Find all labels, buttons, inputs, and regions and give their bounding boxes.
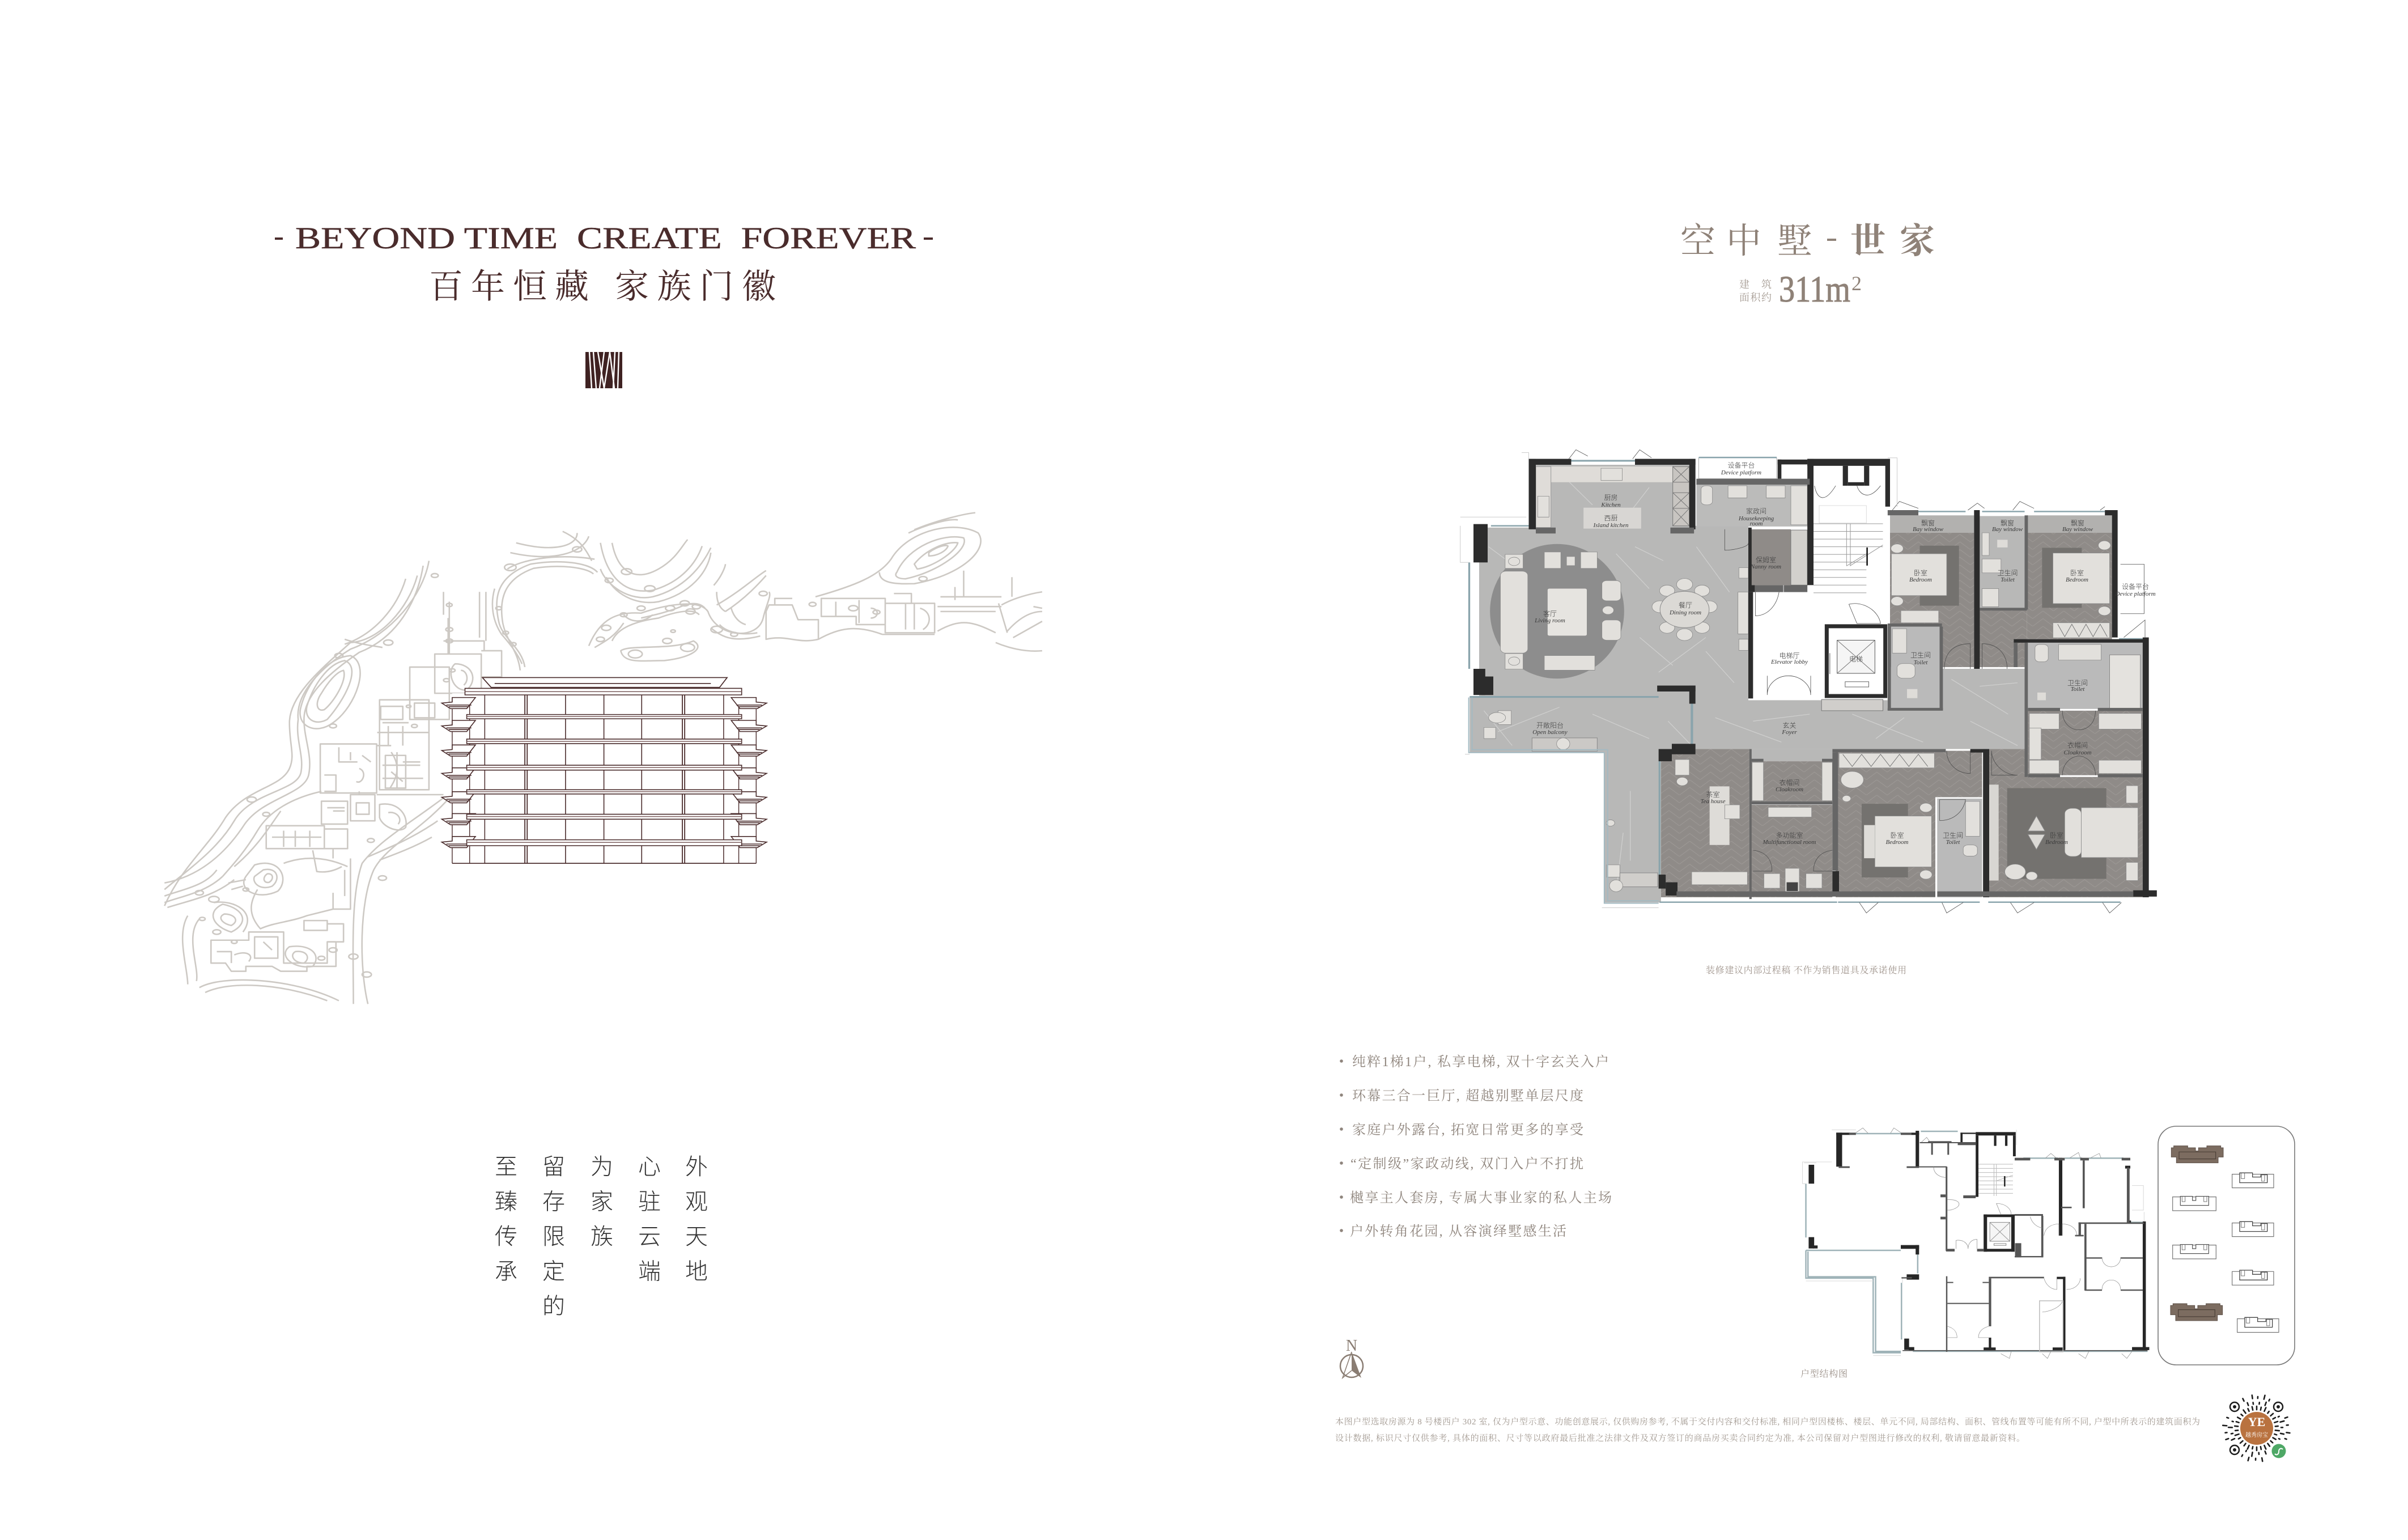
room labels: 衣帽间	[2067, 741, 2088, 749]
chinese slogan: 百年恒藏	[429, 268, 589, 306]
footnote	[1335, 1416, 2200, 1443]
walls	[1473, 459, 2157, 897]
room labels: 设备平台	[2122, 583, 2149, 591]
room labels: 客厅	[1543, 610, 1557, 618]
room labels: 西厨	[1604, 514, 1618, 522]
room labels: Bay window	[1913, 526, 1944, 533]
room labels: Toilet	[2001, 576, 2015, 583]
highlighted building bottom	[2171, 1304, 2223, 1321]
left heading block	[275, 221, 933, 388]
room labels: 卫生间	[2067, 679, 2088, 687]
landscape line drawing	[164, 513, 1042, 1004]
room labels: 卧室	[2050, 831, 2063, 839]
stairs	[1814, 524, 1883, 593]
highlighted building top	[2171, 1146, 2223, 1163]
room labels: 卧室	[2070, 569, 2084, 577]
room labels: 家政间	[1746, 507, 1766, 515]
area label: 面积约	[1739, 292, 1772, 303]
poem vertical text	[495, 1155, 708, 1319]
room labels: 卧室	[1914, 569, 1927, 577]
key plan buildings	[2171, 1146, 2279, 1333]
rugs	[1490, 544, 1624, 678]
room labels: 餐厅	[1679, 601, 1692, 609]
room labels: room	[1750, 520, 1763, 527]
room labels: Living room	[1534, 617, 1565, 624]
room labels: 玄关	[1782, 722, 1797, 729]
main floor plan	[1460, 450, 2157, 913]
poem column 1: 外观天地	[685, 1155, 708, 1284]
room labels: Toilet	[1914, 659, 1928, 666]
unit title: 世	[1850, 222, 1885, 261]
room labels: 衣帽间	[1779, 779, 1800, 787]
room labels: Bedroom	[2045, 839, 2068, 846]
feature bullet list: 家庭户外露台, 拓宽日常更多的享受	[1352, 1122, 1583, 1138]
unit title	[1680, 222, 1935, 261]
area label: 2	[1851, 272, 1862, 295]
key plan panel	[2158, 1126, 2295, 1365]
english slogan: BEYOND TIME CREATE FOREVER	[295, 221, 916, 255]
unit title: 空	[1680, 222, 1715, 261]
QR code	[2223, 1395, 2290, 1461]
north compass icon: N	[1346, 1337, 1357, 1355]
chinese slogan	[429, 268, 776, 306]
footnote: 本图户型选取房源为 8 号楼西户 302 室, 仅为户型示意、功能创意展示, 仅供购房参考, 不属于交付内容和交付标准, 相同户型因楼栋、楼层、单元不同, 局部结构、面积、管线布置等可能有所不同, 户型中所表示的建筑面积为	[1335, 1416, 2200, 1427]
room labels: 电梯	[1849, 655, 1863, 663]
unit title: 家	[1900, 222, 1935, 261]
qr finders	[2230, 1402, 2283, 1454]
mini program badge	[2271, 1444, 2286, 1458]
room labels: Foyer	[1781, 729, 1797, 736]
room labels: Toilet	[1946, 839, 1960, 846]
building elevation	[441, 677, 767, 863]
north compass icon	[1340, 1337, 1363, 1378]
room labels: Nanny room	[1750, 563, 1781, 570]
feature bullet list	[1340, 1054, 1612, 1239]
plan graphics	[1460, 450, 2157, 913]
room labels: 卫生间	[1943, 831, 1963, 839]
unit title: 墅	[1777, 222, 1812, 261]
structure drawing	[1802, 1128, 2149, 1359]
room labels: 茶室	[1706, 791, 1720, 799]
room labels: Device platform	[1721, 469, 1761, 476]
room labels: Dining room	[1669, 609, 1701, 616]
room labels: 卧室	[1890, 831, 1904, 839]
room labels: 厨房	[1604, 494, 1618, 502]
qr center logo	[2240, 1412, 2273, 1445]
feature bullet list: 户外转角花园, 从容演绎墅感生活	[1350, 1224, 1566, 1239]
room labels: Device platform	[2114, 591, 2156, 597]
room labels: Housekeeping	[1738, 515, 1774, 522]
feature bullet list: “定制级”家政动线, 双门入户不打扰	[1350, 1156, 1583, 1172]
poem column 2: 心驻云端	[638, 1155, 661, 1284]
elevator	[1827, 626, 1885, 696]
furniture	[1500, 571, 1528, 653]
room labels: Elevator lobby	[1770, 659, 1808, 665]
room labels: 设备平台	[1727, 461, 1755, 469]
unit title: 中	[1726, 222, 1761, 261]
room labels: 开敞阳台	[1536, 722, 1564, 729]
room labels	[1532, 461, 2156, 846]
poem column 4: 留存限定的	[542, 1155, 565, 1319]
room labels: Bedroom	[2066, 576, 2088, 583]
room labels: 飘窗	[1921, 519, 1935, 527]
room labels: Kitchen	[1600, 502, 1621, 508]
poem column 5: 至臻传承	[495, 1155, 517, 1284]
poem column 3: 为家族	[591, 1155, 613, 1249]
qr center logo: 越秀房宝	[2245, 1431, 2268, 1439]
qr dashes	[2223, 1395, 2290, 1461]
room labels: 电梯厅	[1779, 652, 1800, 660]
room labels: Bay window	[2062, 526, 2093, 533]
room labels: Multifunctional room	[1762, 839, 1816, 846]
room labels: Island kitchen	[1592, 522, 1629, 529]
area label	[1739, 269, 1862, 310]
room labels: Bedroom	[1886, 839, 1909, 846]
room labels: Tea house	[1701, 798, 1726, 805]
room labels: 卫生间	[1910, 651, 1931, 659]
room labels: Bedroom	[1909, 576, 1932, 583]
outlined buildings	[2173, 1173, 2279, 1333]
qr center logo: YE	[2248, 1415, 2265, 1429]
area label: 建	[1739, 279, 1749, 290]
room labels: 卫生间	[1997, 569, 2018, 577]
footnote: 设计数据, 标识尺寸仅供参考, 具体的面积、尺寸等以政府最后批准之法律文件及双方签订的商品房买卖合同约定为准, 本公司保留对户型图进行修改的权利, 敬请留意最新资料。	[1335, 1433, 2025, 1443]
feature bullet list: 纯粹1梯1户, 私享电梯, 双十字玄关入户	[1352, 1054, 1609, 1070]
structure caption: 户型结构图	[1800, 1369, 1848, 1379]
room labels: Open balcony	[1532, 729, 1568, 736]
glass	[1468, 457, 2143, 903]
brand logo	[585, 352, 622, 388]
area label: 筑	[1761, 279, 1772, 290]
right heading block	[1680, 222, 1935, 310]
room labels: Toilet	[2071, 686, 2085, 693]
room labels: Cloakroom	[1776, 786, 1803, 793]
feature bullet list: 樾享主人套房, 专属大事业家的私人主场	[1350, 1190, 1612, 1206]
feature bullet list: 环幕三合一巨厅, 超越别墅单层尺度	[1352, 1088, 1583, 1104]
chinese slogan: 家族门徽	[615, 268, 776, 306]
room labels: 保姆室	[1756, 556, 1776, 564]
room labels: Cloakroom	[2063, 749, 2092, 756]
room labels: 飘窗	[2071, 519, 2084, 527]
structure plan	[1800, 1128, 2149, 1379]
room labels: 多功能室	[1776, 831, 1803, 839]
door swings	[1725, 486, 2095, 871]
area label: 311m	[1779, 269, 1850, 310]
room labels: Bay window	[1992, 526, 2023, 533]
illustration: landscape map with building	[164, 513, 1042, 1004]
room labels: 飘窗	[2001, 519, 2014, 527]
plan disclaimer: 装修建议内部过程稿 不作为销售道具及承诺使用	[1706, 965, 1906, 975]
